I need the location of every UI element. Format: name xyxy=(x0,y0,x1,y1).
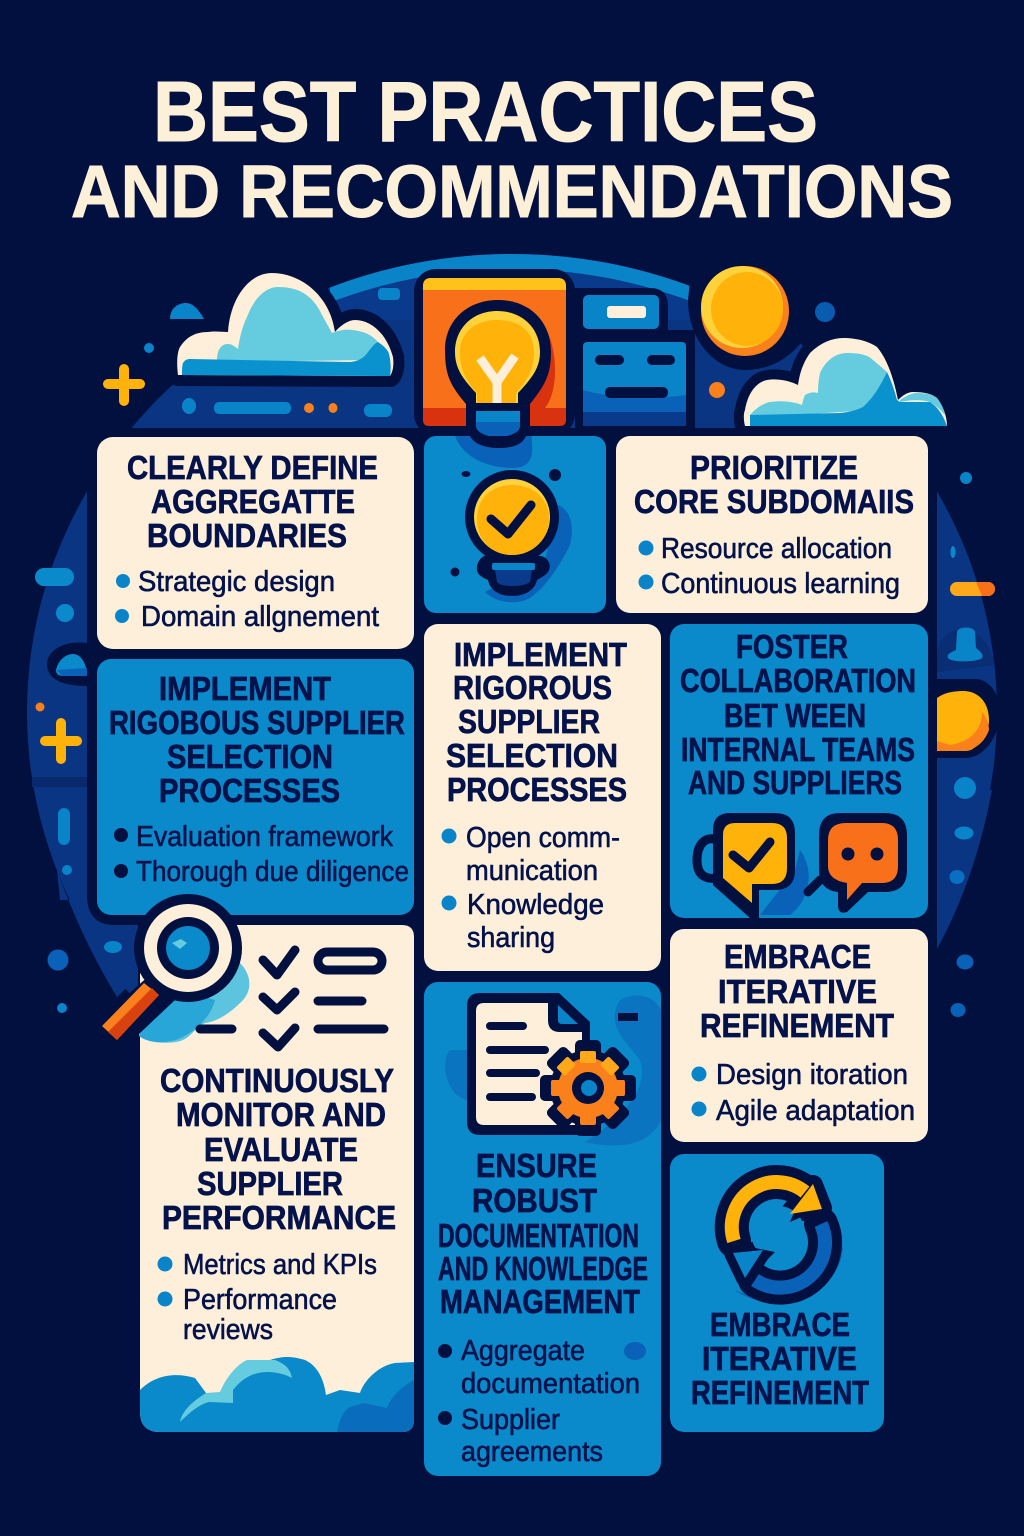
panel: embrace iterative refinement cream: ITERATIVE xyxy=(718,973,877,1010)
panel: documentation and knowledge management: MANAGEMENT xyxy=(440,1283,640,1320)
icon: chat bubbles xyxy=(697,813,907,918)
title: AND RECOMMENDATIONS xyxy=(71,150,953,233)
panel: embrace iterative refinement cream: Agile adaptation xyxy=(716,1095,915,1127)
panel: documentation and knowledge management: documentation xyxy=(461,1368,640,1400)
panel: supplier selection cream: Open comm- xyxy=(466,822,620,854)
panel: foster collaboration: COLLABORATION xyxy=(680,662,916,699)
title xyxy=(71,65,953,233)
panel: supplier selection cream: sharing xyxy=(467,922,555,954)
right side decorations xyxy=(937,472,1000,1017)
panel: foster collaboration: BET WEEN xyxy=(724,697,866,734)
panel: clearly define aggregate boundaries: Strategic design xyxy=(138,566,335,598)
panel: clearly define aggregate boundaries: CLEARLY DEFINE xyxy=(127,449,378,486)
panel: embrace iterative refinement blue: REFINEMENT xyxy=(691,1374,869,1411)
panel: supplier selection blue: IMPLEMENT xyxy=(159,670,331,707)
left side decorations xyxy=(35,568,122,1013)
panel: continuously monitor and evaluate: Metrics and KPIs xyxy=(183,1249,377,1281)
panel: supplier selection cream: RIGOROUS xyxy=(453,669,612,706)
panel: supplier selection cream: SUPPLIER xyxy=(458,703,600,740)
panel: foster collaboration: AND SUPPLIERS xyxy=(688,764,902,801)
title: BEST PRACTICES xyxy=(153,65,818,160)
panel: embrace iterative refinement blue: EMBRACE xyxy=(710,1306,850,1343)
panel: continuously monitor and evaluate: EVALUATE xyxy=(204,1131,358,1168)
panel: supplier selection blue: Evaluation framework xyxy=(136,821,393,853)
panel: foster collaboration: FOSTER xyxy=(736,628,848,665)
panel: supplier selection cream: PROCESSES xyxy=(447,771,627,808)
panel: embrace iterative refinement cream xyxy=(670,929,928,1142)
panel: documentation and knowledge management: agreements xyxy=(461,1436,603,1468)
icon: magnifying glass xyxy=(94,894,242,1050)
icon: checklist xyxy=(200,950,384,1047)
panel: embrace iterative refinement blue xyxy=(670,1154,884,1432)
panel: clearly define aggregate boundaries: AGGREGATTE xyxy=(151,483,355,520)
icon: orange light bulb panel xyxy=(414,269,575,450)
icon: left cloud xyxy=(177,273,393,376)
panel: supplier selection blue: PROCESSES xyxy=(159,772,340,809)
icon: check bulb xyxy=(450,436,561,596)
panel: documentation and knowledge management xyxy=(424,982,661,1476)
icon: document with gear xyxy=(467,993,638,1136)
panel: embrace iterative refinement cream: Design itoration xyxy=(716,1059,908,1091)
panel: prioritize core subdomains: Resource allocation xyxy=(661,533,892,565)
panel: continuously monitor and evaluate: Performance xyxy=(183,1284,337,1316)
panel: supplier selection cream: SELECTION xyxy=(446,737,618,774)
panel: continuously monitor and evaluate: PERFORMANCE xyxy=(162,1199,396,1236)
panel: documentation and knowledge management: AND KNOWLEDGE xyxy=(438,1250,648,1287)
panel: documentation and knowledge management: Supplier xyxy=(461,1404,560,1436)
panel: check bulb xyxy=(424,436,606,613)
icon: sun xyxy=(688,240,810,370)
panel: prioritize core subdomains: Continuous learning xyxy=(661,568,900,600)
panel: continuously monitor and evaluate: SUPPLIER xyxy=(197,1165,343,1202)
panel: continuously monitor and evaluate: CONTINUOUSLY xyxy=(160,1062,394,1099)
panel: prioritize core subdomains: PRIORITIZE xyxy=(690,449,858,486)
panel: embrace iterative refinement cream: REFINEMENT xyxy=(700,1007,894,1044)
panel: foster collaboration: INTERNAL TEAMS xyxy=(681,731,915,768)
panel: supplier selection cream xyxy=(424,624,661,971)
icon: server strip xyxy=(182,398,392,417)
panel: continuously monitor and evaluate: reviews xyxy=(183,1314,273,1346)
panel: supplier selection blue: SELECTION xyxy=(167,738,333,775)
panel: supplier selection blue xyxy=(97,659,414,915)
panel: continuously monitor and evaluate xyxy=(139,925,414,1432)
top left decorations xyxy=(108,288,835,401)
background globe xyxy=(27,254,997,997)
panel: continuously monitor and evaluate: MONITOR AND xyxy=(176,1096,386,1133)
bottom clouds xyxy=(140,1357,414,1432)
icon: refresh arrows xyxy=(732,1182,825,1288)
panel: supplier selection cream: IMPLEMENT xyxy=(454,636,627,673)
panel: documentation and knowledge management: DOCUMENTATION xyxy=(438,1217,639,1254)
panel: supplier selection blue: Thorough due diligence xyxy=(136,856,409,888)
panel: embrace iterative refinement cream: EMBRACE xyxy=(724,938,871,975)
panel: foster collaboration xyxy=(670,624,928,918)
panel: prioritize core subdomains: CORE SUBDOMAIIS xyxy=(634,483,914,520)
panel: documentation and knowledge management: ENSURE xyxy=(476,1147,597,1184)
panel: documentation and knowledge management: Aggregate xyxy=(461,1335,585,1367)
panel: clearly define aggregate boundaries: BOUNDARIES xyxy=(147,517,347,554)
icon: right cloud xyxy=(744,338,947,426)
panel: clearly define aggregate boundaries xyxy=(97,437,414,649)
panel: supplier selection blue: RIGOBOUS SUPPLIER xyxy=(109,704,405,741)
panel: supplier selection cream: munication xyxy=(466,855,598,887)
panel: documentation and knowledge management: ROBUST xyxy=(472,1182,597,1219)
panel: supplier selection cream: Knowledge xyxy=(467,889,604,921)
icon: interface windows xyxy=(575,288,695,436)
panel: clearly define aggregate boundaries: Domain allgnement xyxy=(141,601,379,633)
panel: prioritize core subdomains xyxy=(616,436,928,613)
panel: embrace iterative refinement blue: ITERATIVE xyxy=(702,1340,857,1377)
